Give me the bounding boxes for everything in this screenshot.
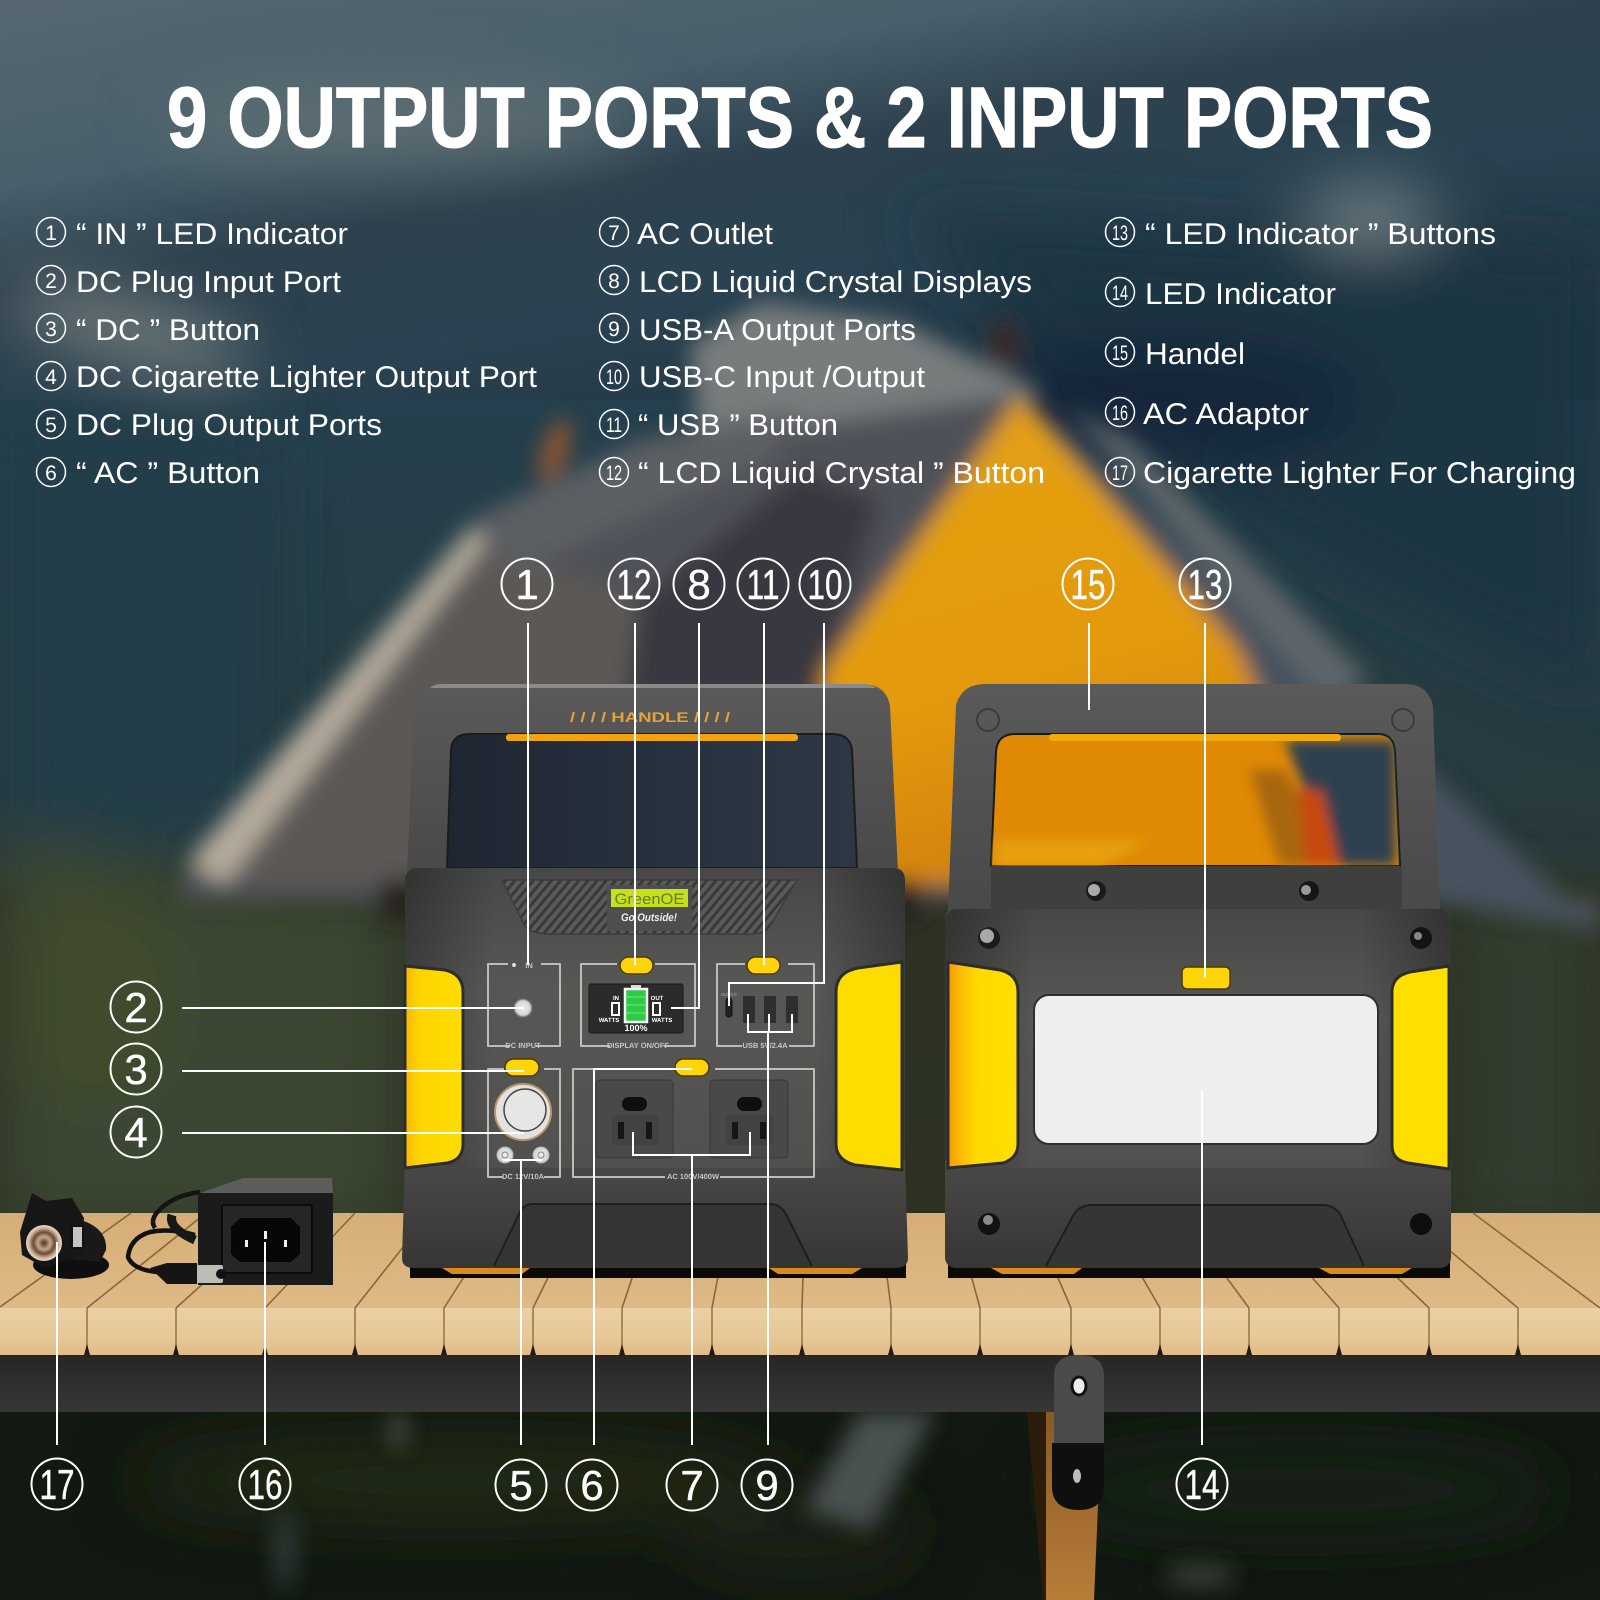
callout 1	[502, 558, 552, 610]
legend item 12: “ LCD Liquid Crystal ” Button	[638, 457, 1045, 490]
legend item 10: USB-C Input /Output	[639, 361, 926, 394]
legend item 15	[1106, 338, 1245, 371]
legend item 6: 6	[45, 462, 57, 485]
callout 4	[110, 1106, 162, 1158]
USB panel: OUTPUT	[721, 992, 738, 997]
DC output panel: DC 12V/10A	[502, 1172, 545, 1181]
legend item 14: LED Indicator	[1145, 278, 1336, 311]
legend item 15: 15	[1112, 342, 1128, 365]
legend item 9: USB-A Output Ports	[639, 314, 916, 347]
callout 12: 12	[616, 561, 652, 608]
callout 2	[110, 982, 162, 1032]
rear recessed top	[991, 866, 1402, 912]
legend item 17: 17	[1112, 462, 1128, 485]
legend item 7: 7	[608, 222, 620, 245]
callout 10: 10	[808, 561, 842, 608]
legend column 3	[1106, 218, 1576, 490]
rear orange feet	[991, 1268, 1412, 1274]
legend item 12: 12	[606, 462, 622, 485]
LCD display panel	[581, 964, 695, 1050]
callout 15: 15	[1070, 561, 1106, 608]
icon: cigarette lighter charger	[20, 1193, 109, 1279]
front view of power station	[402, 684, 908, 1274]
legend item 13: “ LED Indicator ” Buttons	[1145, 218, 1496, 251]
callout 8	[674, 558, 724, 610]
callout 2: 2	[124, 984, 148, 1031]
leader lines	[57, 623, 1205, 1445]
callout 6: 6	[580, 1462, 604, 1509]
legend column 1	[36, 218, 538, 490]
legend item 7: AC Outlet	[637, 218, 774, 251]
legend item 5: DC Plug Output Ports	[76, 409, 382, 442]
LCD display panel: WATTS	[599, 1017, 619, 1024]
legend item 3: 3	[45, 318, 57, 341]
LCD display panel: WATTS	[652, 1017, 672, 1024]
callout 17: 17	[40, 1461, 74, 1508]
callout 5	[496, 1460, 546, 1510]
legend item 4: DC Cigarette Lighter Output Port	[76, 361, 538, 394]
rear screws	[978, 927, 1432, 1235]
legend item 10: 10	[606, 366, 622, 389]
callout 8: 8	[687, 561, 711, 608]
legend item 3: “ DC ” Button	[76, 314, 260, 347]
legend item 8: LCD Liquid Crystal Displays	[639, 266, 1032, 299]
callout 9	[742, 1460, 792, 1510]
callout 6	[566, 1460, 618, 1510]
front body	[405, 868, 905, 1268]
icon: AC adaptor	[128, 1178, 333, 1285]
background: blurred tent	[180, 302, 1600, 1590]
LCD display panel: DISPLAY ON/OFF	[607, 1041, 669, 1050]
rear view of power station	[945, 684, 1451, 1274]
LCD display panel: OUT	[651, 995, 664, 1002]
callout 16: 16	[248, 1461, 282, 1508]
device shadow on table	[410, 1262, 1450, 1278]
callout 4: 4	[124, 1109, 148, 1156]
table support beam	[0, 1355, 1600, 1412]
callout 13: 13	[1188, 561, 1222, 608]
legend item 16: AC Adaptor	[1143, 398, 1309, 431]
yellow side grips	[405, 962, 902, 1170]
USB panel	[717, 964, 814, 1050]
rear lower bumper	[945, 1160, 1451, 1268]
callout 1: 1	[515, 561, 539, 608]
legend item 17: Cigarette Lighter For Charging	[1143, 457, 1576, 490]
legend item 13: 13	[1112, 222, 1128, 245]
callout 5: 5	[509, 1462, 533, 1509]
legend item 11: 11	[606, 414, 622, 437]
callout 9: 9	[755, 1462, 779, 1509]
legend item 9: 9	[608, 318, 620, 341]
front lower bumper	[402, 1160, 908, 1268]
legend item 8: 8	[608, 270, 620, 293]
speaker vent and logo: GreenOE	[614, 891, 684, 908]
callout 11: 11	[746, 561, 780, 608]
LCD display panel: IN	[613, 995, 619, 1002]
legend item 1: 1	[45, 222, 57, 245]
legend item 11: “ USB ” Button	[638, 409, 838, 442]
legend item 6: “ AC ” Button	[76, 457, 260, 490]
speaker vent and logo: Go Outside!	[621, 912, 677, 924]
front handle: / / / / HANDLE / / / /	[570, 709, 730, 725]
callout 3	[110, 1044, 162, 1094]
DC input panel: IN	[525, 961, 533, 970]
rear body	[945, 909, 1451, 1268]
LCD display panel: 100%	[624, 1023, 648, 1033]
front handle	[407, 684, 898, 872]
legend item 15: Handel	[1145, 338, 1245, 371]
callout markers	[32, 558, 1230, 1510]
AC outlets panel: AC 100V/400W	[667, 1172, 720, 1181]
rear yellow grips	[948, 962, 1449, 1169]
wooden table top with slats	[0, 1213, 1600, 1355]
callout 14: 14	[1184, 1461, 1220, 1508]
legend item 4: 4	[45, 366, 57, 389]
AC outlets panel	[573, 1069, 814, 1181]
legend item 5: 5	[45, 414, 57, 437]
DC input panel	[488, 961, 560, 1050]
callout 7: 7	[680, 1462, 704, 1509]
rear handle	[948, 684, 1440, 912]
USB panel: USB 5V/2.4A	[742, 1041, 788, 1050]
callout 7	[666, 1460, 718, 1510]
table leg and bracket	[1027, 1355, 1104, 1600]
front buttons	[505, 957, 780, 1076]
LED button	[1182, 967, 1230, 989]
legend item 2: 2	[45, 270, 57, 293]
legend item 2: DC Plug Input Port	[76, 266, 342, 299]
legend column 2	[600, 218, 1045, 490]
front orange feet	[442, 1268, 862, 1274]
DC input panel: DC INPUT	[505, 1041, 541, 1050]
LED light panel	[1034, 995, 1378, 1144]
callout 3: 3	[124, 1046, 148, 1093]
legend item 14: 14	[1112, 282, 1128, 305]
speaker vent and logo	[502, 880, 797, 934]
legend item 16: 16	[1112, 402, 1128, 425]
legend item 1: “ IN ” LED Indicator	[76, 218, 348, 251]
DC output panel	[488, 1069, 560, 1181]
